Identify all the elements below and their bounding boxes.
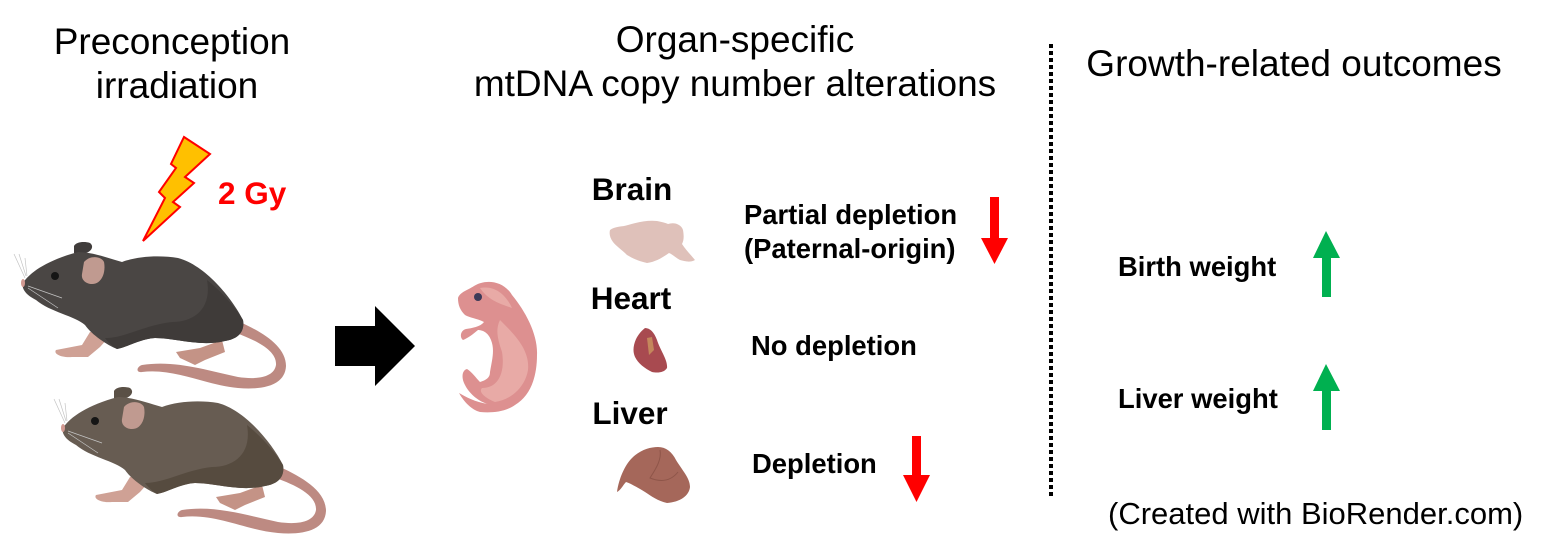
arrow: birth weight increase — [1313, 231, 1340, 297]
icon: brain — [610, 221, 695, 263]
heading: organ-specific alterations: Organ-specific — [616, 19, 854, 60]
heading: preconception irradiation: irradiation — [96, 65, 258, 106]
icon: liver — [617, 447, 690, 503]
label: Brain: Brain — [592, 171, 672, 207]
heading: organ-specific alterations: mtDNA copy number alterations — [474, 63, 996, 104]
text: partial depletion: (Paternal-origin) — [744, 233, 956, 264]
icon: newborn pup — [458, 282, 537, 412]
heading: preconception irradiation: Preconception — [54, 21, 290, 62]
text: depletion: Depletion — [752, 448, 877, 479]
arrow: liver weight increase — [1313, 364, 1340, 430]
icon: control mouse — [54, 387, 326, 533]
text: no depletion: No depletion — [751, 330, 917, 361]
arrow: brain decrease — [981, 197, 1008, 264]
divider: dotted line — [1049, 44, 1053, 497]
text: partial depletion: Partial depletion — [744, 199, 957, 230]
label: Liver: Liver — [592, 395, 668, 431]
icon: heart — [633, 328, 667, 373]
arrow: black block arrow — [335, 306, 415, 386]
heading: preconception irradiation — [54, 21, 290, 106]
label: 2 Gy: 2 Gy — [218, 175, 287, 211]
arrow: liver decrease — [903, 436, 930, 502]
icon: irradiated mouse — [14, 242, 286, 388]
label: Heart: Heart — [591, 280, 672, 316]
label: liver weight: Liver weight — [1118, 383, 1278, 414]
label: birth weight: Birth weight — [1118, 251, 1276, 282]
heading: organ-specific alterations — [474, 19, 996, 104]
text: attribution: (Created with BioRender.com) — [1108, 496, 1523, 531]
heading: growth-related outcomes: Growth-related outcomes — [1086, 43, 1502, 84]
text: partial depletion — [744, 199, 957, 264]
icon: lightning bolt — [143, 137, 210, 241]
